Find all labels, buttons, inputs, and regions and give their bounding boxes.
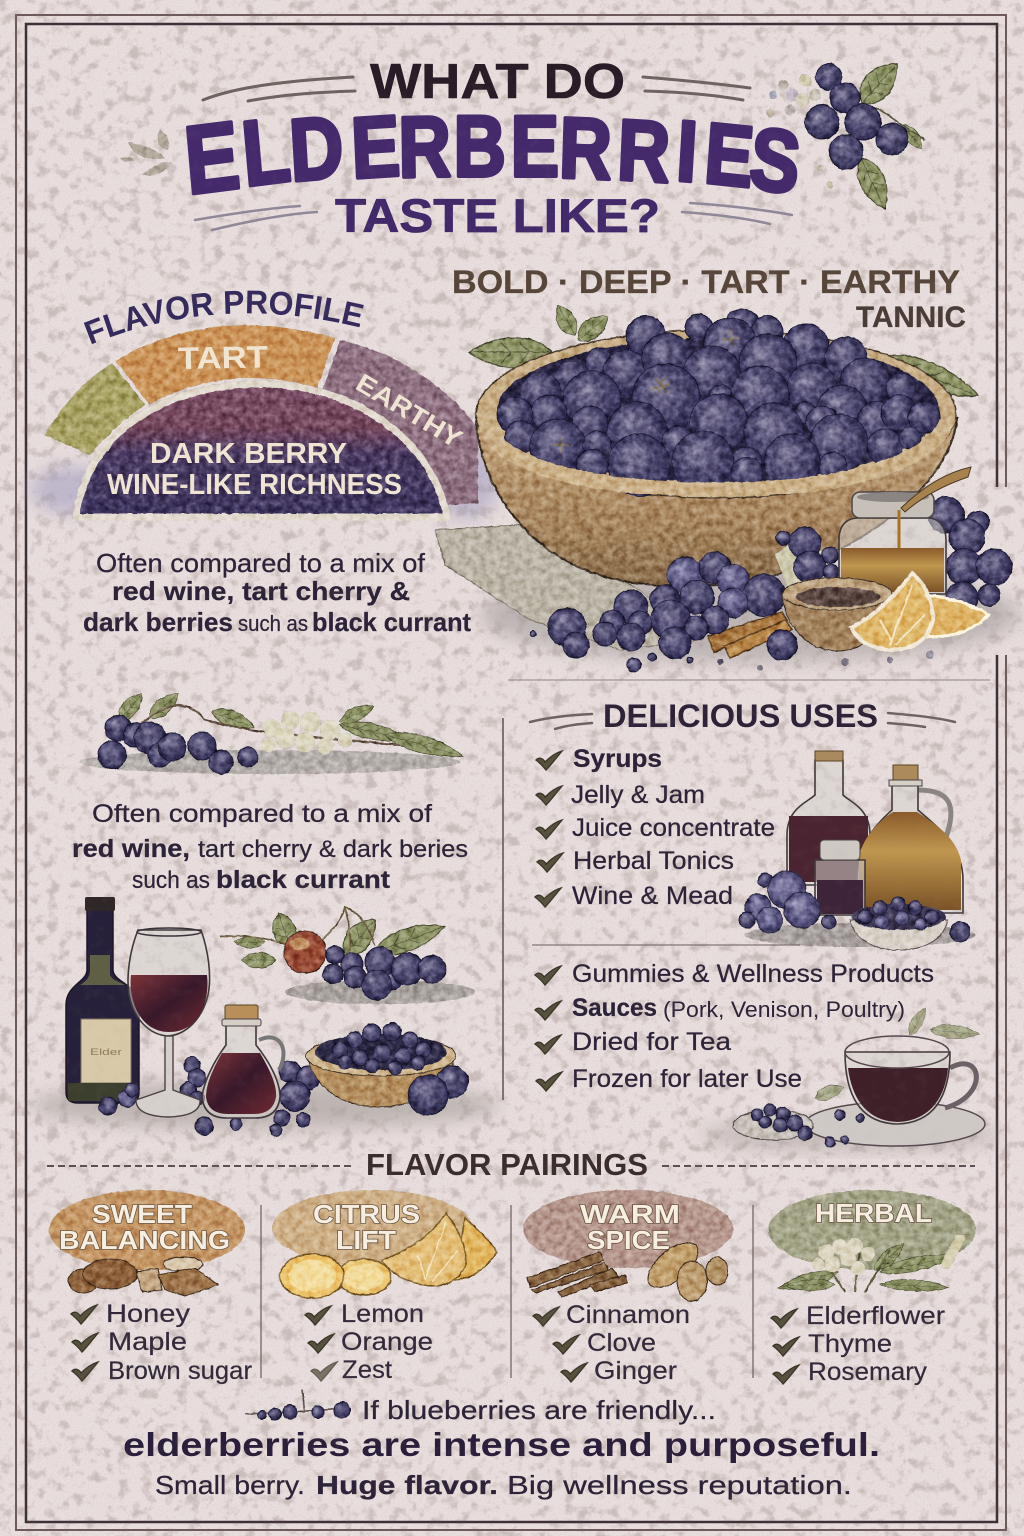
illustration: syrup bottles: [787, 751, 963, 915]
text block: comparison repeat: black currant: [216, 866, 391, 894]
title line: elderberries: R: [398, 98, 451, 195]
title line: elderberries: R: [558, 99, 613, 198]
pairing: sweet balancing: SWEET: [92, 1199, 192, 1229]
pairing: sweet balancing: Brown sugar: [108, 1357, 252, 1385]
title swooshes: [195, 77, 792, 230]
uses list: first group: Herbal Tonics: [573, 847, 734, 875]
pairing: citrus lift: Lemon: [341, 1300, 424, 1328]
footer line 2: elderberries are intense and purposeful.: [123, 1426, 880, 1463]
uses list: second group: Sauces: [572, 994, 657, 1022]
gauge segment: tart: [116, 325, 335, 404]
pairing: herbal: [768, 1190, 976, 1386]
uses list: second group: [535, 960, 934, 1093]
pairing column rules: [261, 1205, 753, 1378]
footer line 3: Big wellness reputation.: [507, 1470, 852, 1500]
title: [181, 55, 805, 242]
icon: title berry cluster: [766, 54, 927, 213]
wine bottle: [66, 897, 139, 1103]
title line: elderberries: E: [511, 98, 559, 194]
pairing: sweet balancing: [49, 1190, 252, 1385]
gauge segment: earthy: [323, 340, 478, 505]
panel: flavor pairings: [47, 1147, 976, 1386]
title line: elderberries: R: [616, 101, 672, 201]
small wooden bowl: [782, 578, 892, 651]
pairing: warm spice: Clove: [587, 1329, 656, 1357]
text block: comparison repeat: red wine,: [72, 835, 190, 863]
pairing: citrus lift: LIFT: [336, 1225, 396, 1255]
title line: elderberries: D: [287, 98, 346, 200]
uses list: second group: Gummies & Wellness Products: [572, 960, 934, 988]
title line: elderberries: I: [674, 102, 700, 200]
wine label text: Elder: [90, 1047, 122, 1057]
text block: comparison: such as: [238, 611, 308, 636]
uses list: first group: [535, 745, 775, 910]
uses heading swooshes: [530, 713, 955, 729]
pairing: sweet balancing: Maple: [108, 1328, 187, 1356]
uses list: first group: Jelly & Jam: [571, 781, 705, 809]
panel divider: [502, 718, 504, 1100]
pairings heading: FLAVOR PAIRINGS: [366, 1147, 648, 1182]
syrup jar: [839, 467, 971, 594]
berries in bowl: [497, 309, 940, 496]
title line: what do: WHAT DO: [370, 55, 625, 109]
uses list: first group: Juice concentrate: [572, 814, 775, 842]
small bowl of berries: [306, 1023, 468, 1115]
pairing: herbal: Thyme: [808, 1330, 892, 1358]
illustration: top-left berry sprig: [80, 688, 465, 774]
pairing: sweet balancing: Honey: [106, 1300, 191, 1328]
footer: [123, 1390, 880, 1500]
illustration: wine, cherry and berry still life: [30, 897, 500, 1136]
pairing: warm spice: WARM: [580, 1199, 680, 1229]
pairing: warm spice: SPICE: [587, 1225, 670, 1255]
faint section rule: [508, 679, 990, 681]
gauge heading: FLAVOR PROFILE: [84, 290, 364, 344]
cloth: [435, 525, 700, 650]
title line: elderberries: S: [746, 109, 805, 213]
uses list: first group: Syrups: [573, 745, 662, 773]
cinnamon sticks: [708, 612, 792, 658]
title line: elderberries: B: [454, 98, 506, 194]
pairings dashed rules: [47, 1165, 975, 1167]
pairing: warm spice: [523, 1190, 733, 1385]
bowl front rim: [486, 418, 948, 490]
text block: comparison: [83, 548, 471, 637]
text block: comparison repeat: such as: [132, 867, 210, 894]
cherry and berries: [220, 907, 475, 1004]
title line: elderberries: E: [349, 97, 402, 196]
pairing: citrus lift: Zest: [342, 1356, 392, 1384]
tagline: TANNIC: [856, 301, 966, 334]
title line: elderberries: [181, 97, 805, 214]
small berries by bottle: [99, 1057, 320, 1136]
pairing: citrus lift: [272, 1190, 497, 1384]
table shadow: [480, 567, 1020, 663]
ground shadow: [30, 1081, 500, 1129]
icon: left title sprig: [120, 130, 172, 176]
leaves behind bowl: [469, 301, 983, 408]
tagline: BOLD · DEEP · TART · EARTHY: [452, 264, 960, 300]
pairing: herbal: Elderflower: [806, 1302, 945, 1330]
berries and bowl under bottles: [739, 871, 975, 950]
footer line 3: Huge flavor.: [316, 1470, 498, 1500]
uses list: second group: (Pork, Venison, Poultry): [663, 997, 905, 1022]
gauge label: tart: TART: [178, 339, 268, 376]
title line: elderberries: L: [238, 98, 294, 206]
front berry pile: [530, 527, 934, 672]
title line: elderberries: E: [702, 104, 757, 205]
pairing: citrus lift: Orange: [341, 1328, 433, 1356]
pairing: sweet balancing: BALANCING: [59, 1225, 230, 1255]
divider between use groups: [532, 944, 800, 946]
gauge dome: [76, 384, 447, 517]
pairing: herbal: Rosemary: [808, 1358, 928, 1386]
gauge label: wine-like richness: WINE-LIKE RICHNESS: [107, 469, 402, 501]
text block: comparison: red wine, tart cherry &: [112, 576, 410, 606]
text block: comparison: black currant: [312, 607, 471, 637]
wine glass: [128, 928, 210, 1117]
panel: delicious uses: [530, 698, 1000, 1150]
text block: comparison: dark berries: [83, 607, 233, 637]
panel: flavor profile gauge: [25, 290, 540, 544]
gauge segment: olive: [45, 363, 145, 455]
footer line 3: Small berry.: [155, 1470, 305, 1500]
berries right of jar: [928, 497, 1012, 614]
pairing: warm spice: Ginger: [594, 1357, 677, 1385]
gauge label: dark berry: DARK BERRY: [150, 438, 347, 470]
illustration: wooden bowl of elderberries: [435, 301, 1020, 672]
text block: comparison: Often compared to a mix of: [96, 548, 426, 578]
icon: footer berry sprig: [245, 1390, 350, 1420]
title line: elderberries: E: [181, 101, 243, 214]
syrup jug: [202, 1005, 284, 1118]
uses list: second group: Dried for Tea: [572, 1028, 731, 1056]
lemon wedges: [851, 573, 989, 650]
text block: comparison repeat: tart cherry & dark beries: [198, 836, 468, 863]
uses heading: DELICIOUS USES: [603, 698, 878, 734]
footer line 1: If blueberries are friendly...: [362, 1395, 716, 1425]
illustration: tea cup: [700, 1005, 1000, 1150]
text block: comparison repeat: Often compared to a mix of: [92, 800, 432, 828]
gauge haze: [30, 440, 500, 520]
tagline: [452, 264, 966, 334]
text block: comparison repeat: [72, 800, 468, 894]
bowl body: [476, 330, 957, 586]
pairing: citrus lift: CITRUS: [313, 1199, 420, 1229]
uses list: first group: Wine & Mead: [572, 882, 733, 910]
footer line 3: [155, 1470, 852, 1500]
title line: taste like: TASTE LIKE?: [335, 189, 660, 242]
gauge label: earthy: EARTHY: [351, 367, 468, 454]
uses list: second group: Frozen for later Use: [572, 1065, 802, 1093]
pairing: herbal: HERBAL: [815, 1198, 932, 1228]
pairing: warm spice: Cinnamon: [566, 1301, 690, 1329]
